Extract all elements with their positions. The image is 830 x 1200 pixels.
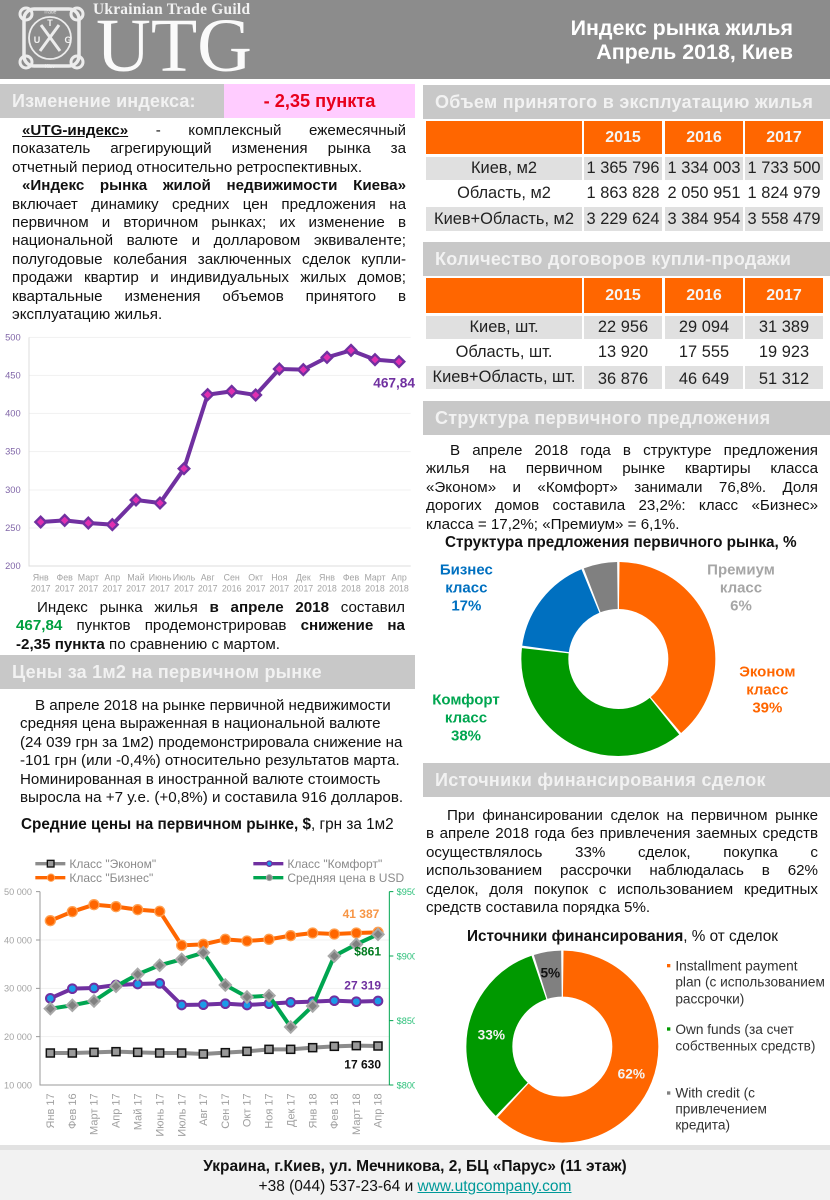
heading: primary supply structure: Структура первичного предложения: [435, 408, 770, 428]
text block: financing sources: сделок, доля покупок с использованием кредитных: [426, 881, 818, 898]
table: commissioned housing: 2017: [766, 129, 802, 146]
text block: UTG index description: «Индекс рынка жилой недвижимости Киева»: [22, 177, 406, 194]
left axis labels: 20 000: [4, 1032, 32, 1042]
segment values: 33%: [478, 1027, 505, 1042]
table: commissioned housing: 1 863 828: [587, 184, 659, 202]
segment labels: 38%: [451, 728, 481, 745]
table: sales contracts: 51 312: [759, 370, 809, 388]
value label: 467,84: [373, 376, 415, 391]
x axis labels: 2017: [270, 583, 289, 593]
x axis labels: Март: [78, 573, 99, 583]
logo: UTG seal and wordmark: T: [47, 18, 53, 28]
data labels: 27 319: [344, 978, 381, 992]
heading: commissioned housing: [423, 85, 830, 119]
y axis labels: [5, 332, 21, 571]
y axis labels: 200: [5, 561, 21, 571]
legend: собственных средств): [675, 1038, 815, 1053]
business class line: [50, 905, 378, 945]
x axis labels: 2018: [389, 583, 409, 593]
table: sales contracts: 2017: [766, 287, 802, 304]
heading: commissioned housing: Объем принятого в эксплуатацию жилья: [435, 92, 813, 112]
table: commissioned housing: 3 229 624: [587, 210, 659, 228]
economy class line: [50, 1046, 378, 1054]
table: sales contracts: Киев+Область, шт.: [433, 368, 575, 386]
logo: UTG seal and wordmark: [18, 1, 252, 79]
text block: UTG index description: [12, 122, 406, 323]
table: commissioned housing: 3 558 479: [748, 210, 820, 228]
text block: financing sources: осуществлялось 33% сделок, покупка с: [426, 844, 818, 861]
legend: Installment payment: [675, 958, 798, 973]
segment labels: класс: [746, 682, 788, 699]
month labels: Март 18: [351, 1093, 363, 1135]
y axis labels: 500: [5, 332, 21, 342]
x axis labels: 2017: [294, 583, 313, 593]
data labels: $861: [354, 945, 381, 959]
heading: primary market prices: [0, 655, 415, 689]
chart title: average prices: Средние цены на первичном рынке, $, грн за 1м2: [21, 816, 394, 833]
x axis labels: Окт: [248, 573, 263, 583]
month labels: Фев 18: [329, 1093, 341, 1129]
data labels: [343, 907, 381, 1071]
table: sales contracts: 22 956: [598, 318, 648, 336]
table: sales contracts: 46 649: [679, 370, 729, 388]
table: commissioned housing: 1 733 500: [748, 159, 820, 177]
heading: index change: [0, 84, 224, 118]
text block: primary market prices: Номинированная в иностранной валюте стоимость: [20, 771, 380, 788]
x axis labels: Апр: [105, 573, 120, 583]
x axis labels: 2017: [55, 583, 75, 593]
text block: financing sources: в апреле 2018 года без привлечения заемных средств: [426, 825, 818, 842]
heading: financing sources: Источники финансирования сделок: [435, 770, 766, 790]
legend: Own funds (за счет: [675, 1022, 795, 1037]
table: sales contracts: 19 923: [759, 343, 809, 361]
x axis labels: Сен: [224, 573, 240, 583]
x axis labels: Апр: [391, 573, 407, 583]
logo: UTG seal and wordmark: G: [64, 35, 72, 45]
footer: [0, 1145, 830, 1200]
index data line: [41, 350, 399, 525]
report title: Индекс рынка жилья: [571, 16, 793, 40]
text block: April index result: -2,35 пункта по сравнению с мартом.: [16, 636, 280, 653]
x axis labels: 2017: [150, 583, 170, 593]
month labels: Сен 17: [220, 1093, 232, 1129]
table: commissioned housing: 2015: [605, 129, 641, 146]
segment values: 5%: [540, 965, 560, 980]
text block: primary market prices: -101 грн (или -0,4%) относительно результатов марта.: [20, 752, 400, 769]
text block: primary supply structure: В апреле 2018 года в структуре предложения: [450, 442, 818, 459]
table: sales contracts: 2015: [605, 287, 641, 304]
report title: [571, 16, 793, 64]
text block: April index result: 467,84 пунктов продемонстрировав снижение на: [16, 617, 405, 634]
table: commissioned housing: Область, м2: [457, 184, 551, 202]
month labels: Ноя 17: [264, 1093, 276, 1129]
table: commissioned housing: 1 365 796: [587, 159, 659, 177]
x axis labels: Май: [127, 573, 145, 583]
heading: financing sources: [423, 763, 830, 797]
x axis labels: Июнь: [149, 573, 172, 583]
text block: financing sources: использованием рассрочки наблюдалась в 62%: [426, 862, 818, 879]
text block: UTG index description: квартальные изменения объемов принятого в: [12, 288, 406, 305]
x axis labels: Янв: [33, 573, 49, 583]
average USD price line: [50, 934, 378, 1027]
text block: primary market prices: [20, 697, 403, 806]
text block: UTG index description: «UTG-индекс» - комплексный ежемесячный: [22, 122, 406, 139]
table: sales contracts: 17 555: [679, 343, 729, 361]
legend: With credit (с: [675, 1085, 755, 1100]
segment labels: Премиум: [707, 562, 775, 579]
segment labels: [432, 562, 795, 745]
data labels: 41 387: [343, 907, 380, 921]
segment values: [478, 965, 645, 1081]
x axis labels: 2016: [222, 583, 242, 593]
table: sales contracts: 13 920: [598, 343, 648, 361]
text block: financing sources: При финансировании сделок на первичном рынке: [447, 807, 818, 824]
text block: April index result: Индекс рынка жилья в апреле 2018 составил: [37, 599, 405, 616]
heading: primary market prices: Цены за 1м2 на первичном рынке: [12, 662, 322, 682]
text block: primary market prices: средняя цена выраженная в национальной валюте: [20, 715, 381, 732]
text block: financing sources: средств составила порядка 5%.: [426, 899, 650, 916]
text block: primary market prices: В апреле 2018 на рынке первичной недвижимости: [35, 697, 391, 714]
left axis labels: [4, 887, 32, 1090]
x axis labels: 2017: [198, 583, 218, 593]
month labels: Июль 17: [176, 1093, 188, 1137]
x axis labels: 2017: [103, 583, 122, 593]
x axis labels: 2018: [317, 583, 337, 593]
donut chart: supply structure: [432, 562, 795, 756]
contacts: +38 (044) 537-23-64 и www.utgcompany.com: [259, 1178, 571, 1194]
text block: UTG index description: отчетный период относительно ретроспективных.: [12, 159, 362, 176]
table: commissioned housing: 3 384 954: [668, 210, 740, 228]
table: commissioned housing: 2016: [686, 129, 722, 146]
legend: [667, 958, 825, 1133]
logo: UTG seal and wordmark: Ukrainian Trade Guild: [93, 1, 250, 18]
month labels: Янв 17: [45, 1093, 57, 1128]
x axis labels: Янв: [319, 573, 335, 583]
legend: рассрочки): [675, 991, 744, 1006]
table: commissioned housing: 1 824 979: [748, 184, 820, 202]
logo: UTG seal and wordmark: Kiev: [45, 64, 55, 70]
table: sales contracts: [426, 278, 823, 389]
x axis labels: Ноя: [271, 573, 288, 583]
segment labels: 17%: [451, 598, 481, 615]
segment labels: класс: [445, 580, 487, 597]
month labels: Окт 17: [242, 1093, 254, 1127]
table: sales contracts: 36 876: [598, 370, 648, 388]
y axis labels: 400: [5, 408, 21, 418]
left axis labels: 10 000: [4, 1080, 32, 1090]
y axis labels: 350: [5, 447, 21, 457]
x axis labels: Июль: [173, 573, 196, 583]
text block: April index result: [16, 599, 405, 653]
text block: primary supply structure: [426, 442, 818, 533]
x axis labels: Март: [364, 573, 386, 583]
legend: plan (с использованием: [675, 974, 825, 989]
text block: UTG index description: эксплуатацию жилья.: [12, 306, 162, 323]
y axis labels: 450: [5, 370, 21, 380]
text block: UTG index description: показатель агрегирующий изменения рынка за: [12, 140, 406, 157]
table: sales contracts: Область, шт.: [456, 343, 552, 361]
table: commissioned housing: Киев, м2: [471, 159, 537, 177]
segment labels: 6%: [730, 598, 752, 615]
callout: index change value: [224, 84, 415, 118]
comfort class line: [50, 983, 378, 1005]
text block: primary supply structure: дорогих домов составила 23,2%: класс «Бизнес»: [426, 497, 818, 514]
header band: [0, 0, 830, 79]
legend: привлечением: [675, 1102, 767, 1117]
table: sales contracts: 29 094: [679, 318, 729, 336]
x axis labels: Авг: [201, 573, 215, 583]
month labels: Май 17: [132, 1093, 144, 1130]
heading: primary supply structure: [423, 401, 830, 435]
left axis labels: 30 000: [4, 984, 32, 994]
y axis labels: 250: [5, 523, 21, 533]
segment labels: класс: [720, 580, 762, 597]
table: commissioned housing: 1 334 003: [668, 159, 740, 177]
legend: Класс "Эконом": [69, 857, 156, 871]
month labels: Март 17: [89, 1093, 101, 1135]
legend: кредита): [675, 1118, 730, 1133]
month labels: Апр 18: [373, 1093, 385, 1128]
legend: [35, 857, 404, 885]
x axis labels: 2017: [126, 583, 146, 593]
text block: primary market prices: (24 039 грн за 1м2) продемонстрировала снижение на: [20, 734, 402, 751]
month labels: Янв 18: [307, 1093, 319, 1128]
chart title: financing: Источники финансирования, % от сделок: [467, 928, 778, 945]
legend: Средняя цена в USD: [287, 871, 404, 885]
table: sales contracts: 2016: [686, 287, 722, 304]
table: commissioned housing: Киев+Область, м2: [434, 210, 574, 228]
left axis labels: 50 000: [4, 887, 32, 897]
x axis labels: [31, 573, 409, 593]
text block: UTG index description: полугодовые колебания заключенных сделок купли-: [12, 251, 406, 268]
right axis labels: [397, 887, 417, 1090]
month labels: Дек 17: [285, 1093, 297, 1127]
logo: UTG seal and wordmark: Trade: [44, 10, 57, 16]
month labels: Авг 17: [198, 1093, 210, 1126]
heading: sales contracts: [423, 242, 830, 276]
x axis labels: Фев: [57, 573, 73, 583]
x axis labels: 2017: [79, 583, 98, 593]
month labels: [45, 1093, 385, 1137]
month labels: Апр 17: [111, 1093, 123, 1128]
segment labels: 39%: [752, 700, 782, 717]
text block: UTG index description: продажи квартир и индивидуальных жилых домов;: [12, 269, 406, 286]
segment values: 62%: [618, 1066, 645, 1081]
line chart: housing market index: [5, 332, 415, 593]
text block: primary supply structure: жилья на первичном рынке квартиры класса: [426, 460, 818, 477]
x axis labels: 2018: [365, 583, 385, 593]
text block: primary market prices: выросла на +7 у.е. (+0,8%) и составила 916 долларов.: [20, 789, 403, 806]
combo line chart: prices by class: [4, 857, 415, 1137]
x axis labels: 2017: [31, 583, 51, 593]
segment labels: Комфорт: [432, 692, 500, 709]
text block: financing sources: [426, 807, 818, 916]
y axis labels: 300: [5, 485, 21, 495]
table: commissioned housing: [426, 121, 823, 231]
text block: UTG index description: включает динамику средних цен предложения на: [12, 196, 406, 213]
table: commissioned housing: 2 050 951: [668, 184, 740, 202]
heading: sales contracts: Количество договоров купли-продажи: [435, 249, 791, 269]
text block: UTG index description: национальной валюте и долларовом эквиваленте;: [12, 232, 406, 249]
chart title: supply structure: Структура предложения первичного рынка, %: [445, 534, 797, 551]
logo: UTG seal and wordmark: U: [34, 35, 40, 45]
table: sales contracts: 31 389: [759, 318, 809, 336]
x axis labels: 2018: [341, 583, 361, 593]
text block: UTG index description: первичном и вторичном рынках; их изменение в: [12, 214, 406, 231]
table: sales contracts: Киев, шт.: [469, 318, 539, 336]
donut chart: financing: [466, 950, 825, 1143]
report title: Апрель 2018, Киев: [596, 40, 793, 64]
axes: [36, 892, 389, 1085]
legend: Класс "Бизнес": [69, 871, 153, 885]
text block: primary supply structure: «Эконом» и «Комфорт» занимали 76,8%. Доля: [426, 479, 818, 496]
segment labels: Бизнес: [440, 562, 493, 579]
month labels: Июнь 17: [154, 1093, 166, 1137]
x axis labels: 2017: [174, 583, 194, 593]
heading: index change: Изменение индекса:: [12, 91, 196, 111]
address: Украина, г.Киев, ул. Мечникова, 2, БЦ «Парус» (11 этаж): [203, 1158, 627, 1175]
callout: index change value: - 2,35 пункта: [264, 91, 375, 111]
month labels: Фев 16: [67, 1093, 79, 1129]
segment labels: класс: [445, 710, 487, 727]
legend: Класс "Комфорт": [287, 857, 382, 871]
x axis labels: Фев: [343, 573, 359, 583]
data labels: 17 630: [344, 1057, 381, 1071]
left axis labels: 40 000: [4, 935, 32, 945]
x axis labels: Дек: [296, 573, 311, 583]
segment labels: Эконом: [739, 664, 795, 681]
text block: primary supply structure: класса = 17,2%; «Премиум» = 6,1%.: [426, 516, 679, 533]
x axis labels: 2017: [246, 583, 266, 593]
